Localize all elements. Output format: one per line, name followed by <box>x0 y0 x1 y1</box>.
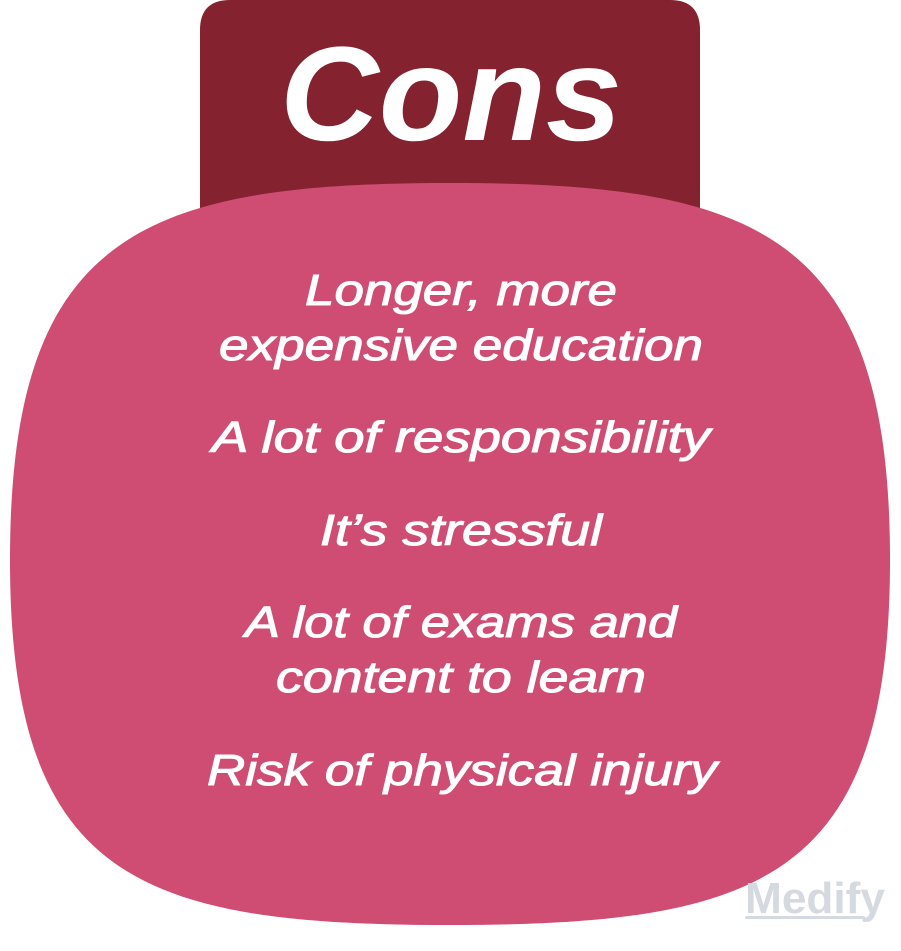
panel: cons blob <box>10 183 890 925</box>
cons list: expensive education <box>219 321 703 370</box>
title: Cons <box>280 20 622 169</box>
cons list: It’s stressful <box>320 506 603 555</box>
cons list: Risk of physical injury <box>207 746 721 795</box>
cons list <box>207 266 721 795</box>
logo: Medify: Medify <box>745 874 886 923</box>
cons list: content to learn <box>276 653 646 702</box>
cons list: A lot of exams and <box>241 598 679 647</box>
cons list: A lot of responsibility <box>208 413 714 462</box>
cons list: Longer, more <box>305 266 617 315</box>
header tab <box>200 0 700 260</box>
